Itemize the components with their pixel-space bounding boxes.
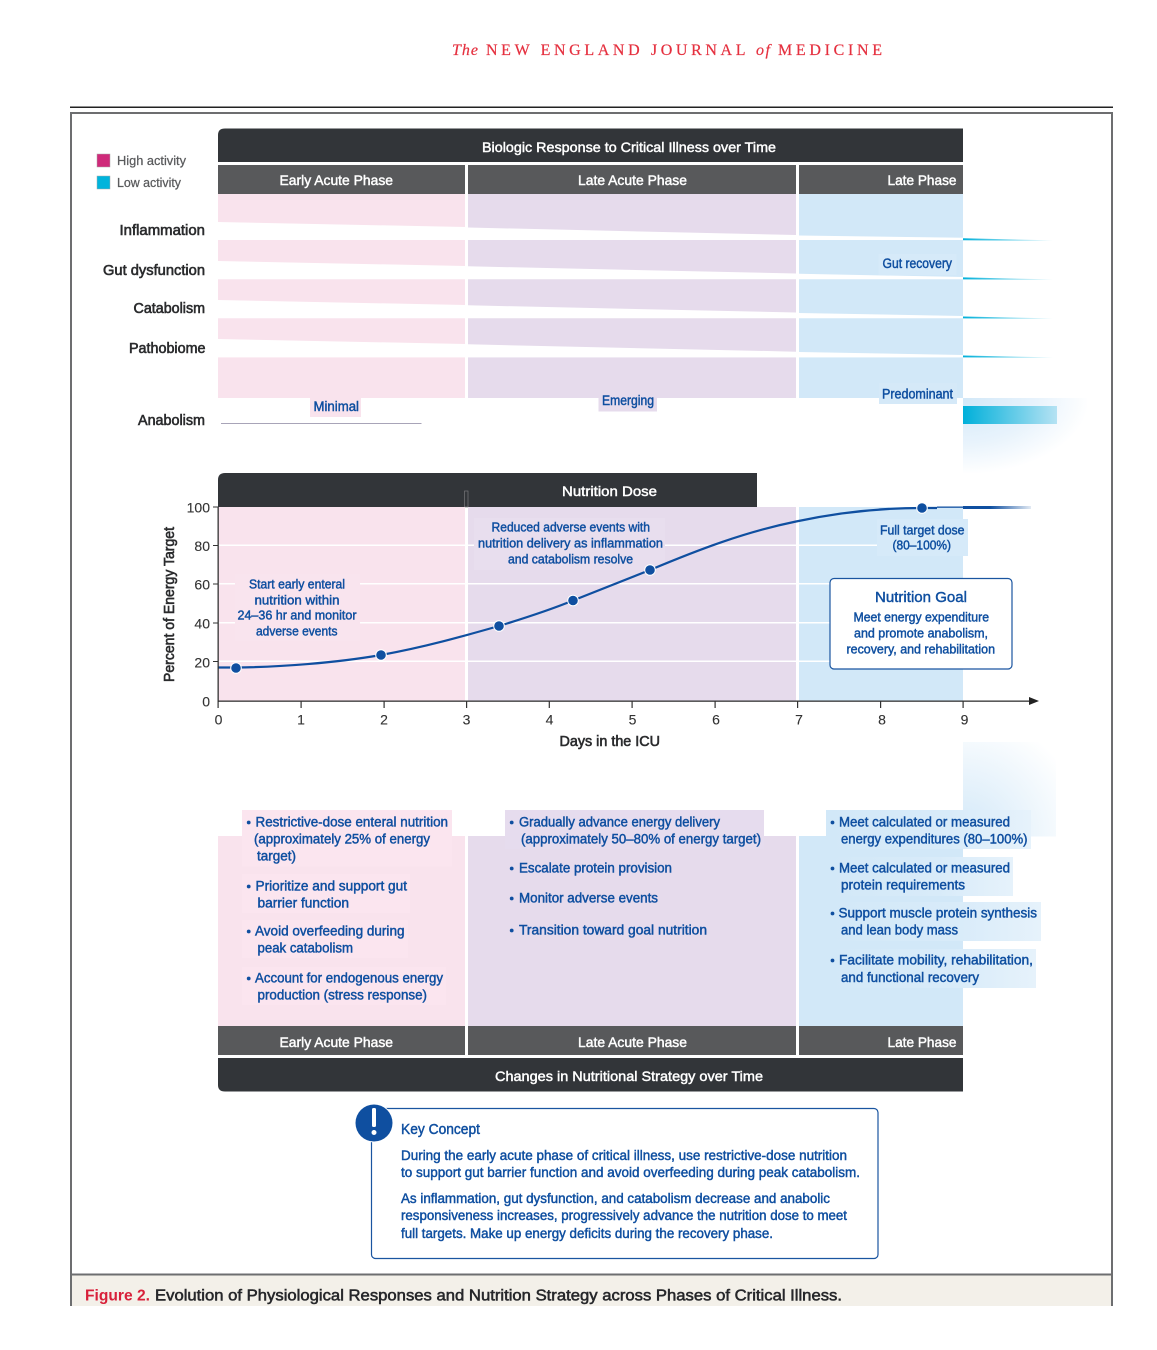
caption: Figure 2. xyxy=(85,1288,150,1304)
late strategy list xyxy=(826,810,1041,988)
strategy phase headers: Late Acute Phase xyxy=(578,1034,687,1050)
journal masthead: of xyxy=(756,42,773,59)
band labels xyxy=(310,254,957,417)
caption xyxy=(70,1274,1113,1306)
callout: key concept: During the early acute phase of critical illness, use restrictive-dose nutrition xyxy=(401,1148,847,1163)
early acute strategy list: Restrictive-dose enteral nutrition xyxy=(256,814,448,830)
early acute strategy list: target) xyxy=(257,848,296,864)
legend xyxy=(97,154,187,190)
axes: 4 xyxy=(546,712,554,728)
dose curve xyxy=(218,503,1031,673)
band labels: Minimal xyxy=(314,399,359,414)
early acute strategy list: Prioritize and support gut xyxy=(256,878,407,894)
axes: 0 xyxy=(215,712,223,728)
axes: 3 xyxy=(463,712,471,728)
callout: nutrition goal: Meet energy expenditure xyxy=(854,610,989,624)
panel: biologic response header: Late Acute Phase xyxy=(578,172,687,188)
early acute strategy list xyxy=(242,810,452,1005)
callout: key concept: As inflammation, gut dysfunction, and catabolism decrease and anabolic xyxy=(401,1191,830,1206)
callout: key concept: to support gut barrier function and avoid overfeeding during peak catabolism. xyxy=(401,1165,860,1180)
late strategy list: energy expenditures (80–100%) xyxy=(841,832,1028,846)
strategy phase headers: Early Acute Phase xyxy=(280,1034,393,1050)
anabolism bar xyxy=(221,398,1087,473)
callout: key concept: Key Concept xyxy=(401,1122,480,1138)
axes: 9 xyxy=(961,712,969,728)
icon: exclamation xyxy=(354,1104,394,1142)
row labels: Catabolism xyxy=(134,301,205,317)
late acute strategy list: Transition toward goal nutrition xyxy=(519,922,707,938)
late acute strategy list: (approximately 50–80% of energy target) xyxy=(521,832,761,846)
axes: 2 xyxy=(380,712,388,728)
journal masthead: The xyxy=(452,42,478,59)
callout: early nutrition: adverse events xyxy=(256,624,338,638)
panel: biologic response header xyxy=(218,128,963,194)
early acute strategy list: Avoid overfeeding during xyxy=(255,924,404,938)
callout: early nutrition xyxy=(235,574,360,641)
caption: Evolution of Physiological Responses and Nutrition Strategy across Phases of Critical Illness. xyxy=(155,1288,842,1304)
axes: 1 xyxy=(297,712,305,728)
journal masthead: NEW ENGLAND JOURNAL xyxy=(486,42,746,59)
axes: 6 xyxy=(712,712,720,728)
late strategy list: and functional recovery xyxy=(841,970,979,985)
axes: 40 xyxy=(194,616,210,632)
panel: nutritional strategy xyxy=(218,742,1056,1092)
axes: 8 xyxy=(878,712,886,728)
strategy phase headers: Late Phase xyxy=(888,1034,957,1050)
axes: Days in the ICU xyxy=(560,734,660,750)
late strategy list: Meet calculated or measured xyxy=(839,814,1010,830)
callout: reduced adverse events: nutrition delivery as inflammation xyxy=(478,536,663,550)
axes: 0 xyxy=(202,694,210,710)
late strategy list: Facilitate mobility, rehabilitation, xyxy=(839,952,1033,968)
callout: nutrition goal: and promote anabolism, xyxy=(854,626,988,640)
callout: full target dose: (80–100%) xyxy=(892,538,951,552)
band labels: Emerging xyxy=(602,393,654,408)
legend: Low activity xyxy=(117,176,182,190)
axes: 60 xyxy=(194,576,210,592)
axes: 100 xyxy=(187,500,210,516)
row labels: Gut dysfunction xyxy=(103,263,205,279)
band labels: Predominant xyxy=(882,386,953,402)
callout: reduced adverse events: and catabolism resolve xyxy=(508,552,633,566)
callout: nutrition goal: recovery, and rehabilitation xyxy=(846,642,995,656)
callout: full target dose xyxy=(877,519,968,556)
chart: nutrition dose: Nutrition Dose xyxy=(562,483,657,499)
early acute strategy list: production (stress response) xyxy=(258,988,427,1002)
early acute strategy list: barrier function xyxy=(258,896,349,910)
early acute strategy list: Account for endogenous energy xyxy=(255,970,443,986)
axes: 80 xyxy=(194,538,210,554)
early acute strategy list: peak catabolism xyxy=(258,940,353,956)
axes: 7 xyxy=(795,712,803,728)
late strategy list: protein requirements xyxy=(841,878,965,892)
callout: full target dose: Full target dose xyxy=(880,522,964,538)
callout: nutrition goal: Nutrition Goal xyxy=(875,589,967,606)
legend: High activity xyxy=(117,154,187,168)
late strategy list: Meet calculated or measured xyxy=(839,860,1010,876)
callout: key concept: responsiveness increases, progressively advance the nutrition dose to meet xyxy=(401,1208,847,1223)
row labels: Inflammation xyxy=(120,223,205,239)
callout: key concept: full targets. Make up energy deficits during the recovery phase. xyxy=(401,1226,773,1241)
panel: biologic response header: Early Acute Phase xyxy=(280,172,393,188)
axes: Percent of Energy Target xyxy=(162,527,178,682)
band labels: Gut recovery xyxy=(882,256,952,271)
panel: biologic response header: Biologic Response to Critical Illness over Time xyxy=(482,139,776,155)
axes xyxy=(162,500,1039,750)
late strategy list: Support muscle protein synthesis xyxy=(838,906,1037,920)
row labels: Pathobiome xyxy=(129,341,206,357)
strategy phase headers xyxy=(218,1026,963,1092)
late acute strategy list xyxy=(505,810,764,938)
panel: biologic response header: Late Phase xyxy=(888,172,957,188)
strategy phase headers: Changes in Nutritional Strategy over Time xyxy=(495,1068,763,1084)
callout: key concept xyxy=(354,1104,878,1258)
callout: nutrition goal xyxy=(830,578,1012,669)
callout: reduced adverse events: Reduced adverse events with xyxy=(492,520,650,534)
late acute strategy list: Monitor adverse events xyxy=(519,890,658,906)
callout: early nutrition: nutrition within xyxy=(254,592,340,608)
late acute strategy list: Escalate protein provision xyxy=(519,860,672,876)
panel: activity bands xyxy=(218,194,1053,398)
late acute strategy list: Gradually advance energy delivery xyxy=(519,814,720,830)
early acute strategy list: (approximately 25% of energy xyxy=(254,832,430,846)
callout: early nutrition: 24–36 hr and monitor xyxy=(238,608,357,622)
journal masthead: MEDICINE xyxy=(778,42,882,59)
row labels: Anabolism xyxy=(138,413,205,429)
row labels xyxy=(103,223,206,429)
journal masthead xyxy=(452,42,882,59)
chart: nutrition dose xyxy=(162,473,1039,750)
axes: 20 xyxy=(194,654,210,670)
callout: reduced adverse events xyxy=(474,518,665,570)
axes: 5 xyxy=(629,712,637,728)
callout: early nutrition: Start early enteral xyxy=(249,576,345,592)
late strategy list: and lean body mass xyxy=(841,922,958,938)
